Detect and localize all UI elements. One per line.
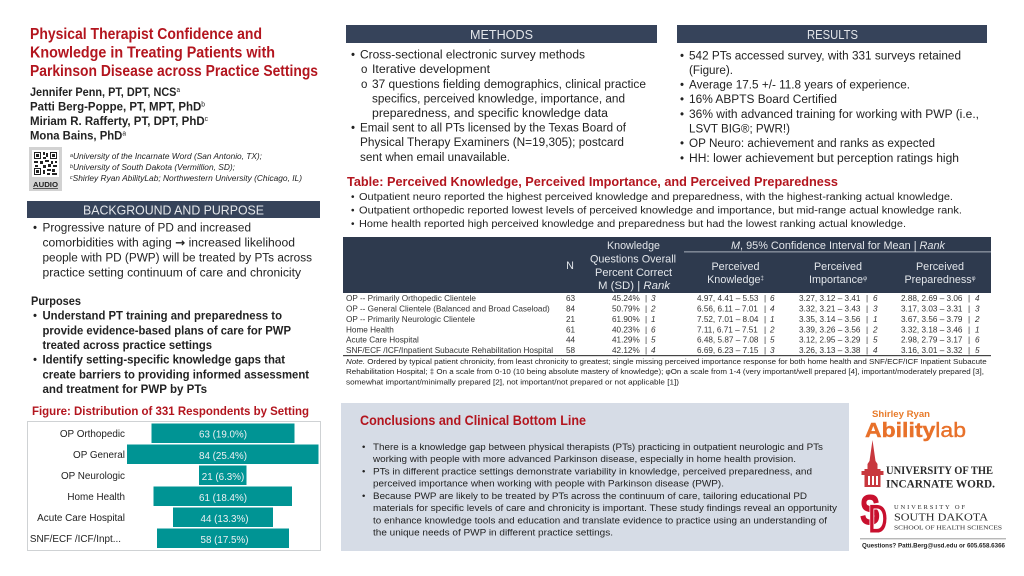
table row: SNF/ECF/ICF: | — [645, 346, 647, 355]
table row: primarily orthopedic: 6 — [770, 294, 775, 303]
table row: SNF/ECF/ICF: 58 — [566, 346, 576, 355]
authors: Mona Bains, PhD — [30, 128, 128, 142]
table header: Perceived — [711, 261, 760, 273]
text block: background — [33, 223, 312, 279]
text block: conclusions: materials for specific levels of care and chronicity is important. These study findings reveal an opportunity — [373, 503, 837, 514]
table header: ‡ — [761, 276, 764, 282]
text block: methods: o — [361, 79, 367, 91]
table header: N — [566, 260, 574, 272]
table row: general clientele: | — [866, 305, 868, 314]
table header: Knowledge — [607, 240, 660, 252]
text block: methods: Email sent to all PTs licensed by the Texas Board of — [360, 123, 627, 135]
table row: acute care hospital: Acute Care Hospital — [346, 336, 419, 345]
text block: table findings: Home health reported high perceived knowledge and preparedness but had the lowest ranking actual knowledge. — [359, 219, 906, 230]
table row: acute care hospital: | — [968, 336, 970, 345]
table row: acute care hospital: | — [866, 336, 868, 345]
table header: Importance — [809, 274, 863, 286]
text block: table findings — [351, 192, 962, 230]
text block: purposes: • — [33, 355, 37, 367]
affiliations: b — [70, 164, 73, 170]
table row: SNF/ECF/ICF: 6.69, 6.23 – 7.15 — [697, 346, 759, 355]
logo: University of South Dakota — [860, 486, 1002, 542]
table row: general clientele: | — [645, 305, 647, 314]
table row: acute care hospital: 6 — [975, 336, 980, 345]
table row: acute care hospital: 5 — [651, 336, 656, 345]
text block: conclusions: PTs in different practice settings demonstrate variability in knowledge, perceived preparedness, and — [373, 466, 812, 477]
bar chart: respondents by setting: OP Orthopedic — [60, 429, 125, 440]
logo: University of the Incarnate Word: UNIVERSITY OF THE — [886, 465, 993, 477]
text block: purposes: and treatment for PWP by PTs — [42, 384, 207, 396]
panel: conclusions — [341, 403, 849, 551]
title — [30, 26, 318, 80]
text block: results: • — [680, 80, 684, 92]
table row: general clientele: OP -- General Clientele (Balanced and Broad Caseload) — [346, 305, 550, 314]
text block: table findings: • — [351, 192, 355, 203]
text block: conclusions: working with people with more advanced Parkinson disease, especially in home health provision. — [372, 454, 796, 465]
table row: primarily neurologic: | — [866, 315, 868, 324]
table header — [343, 237, 991, 293]
table row: home health: 3.39, 3.26 – 3.56 — [799, 325, 861, 334]
table row: home health: 3.32, 3.18 – 3.46 — [901, 325, 963, 334]
table header: Percent Correct — [595, 267, 672, 279]
table row: general clientele: | — [764, 305, 766, 314]
table header: φ — [972, 276, 976, 282]
text block: methods: sent when email unavailable. — [360, 152, 510, 164]
title: Physical Therapist Confidence and — [30, 26, 262, 43]
text block: table findings: Outpatient orthopedic reported lowest levels of perceived knowledge and importance, but mid-range actual knowledge rank. — [359, 206, 962, 216]
text block: results: 542 PTs accessed survey, with 331 surveys retained — [689, 50, 961, 62]
table row: primarily neurologic: | — [764, 315, 766, 324]
text block: conclusions: perceived importance when working with people with Parkinson disease (PWP). — [373, 479, 724, 490]
logo: Shirley Ryan AbilityLab: Shirley Ryan — [872, 409, 930, 420]
table row: primarily neurologic: 1 — [651, 315, 656, 324]
text block: methods: • — [351, 50, 355, 62]
table note: Rehabilitation Hospital; ‡ On a scale from 0-10 (10 being absolute mastery of knowledge); φOn a scale from 1-4 (very important/well prepared [4], important/moderately prepared [3], — [346, 367, 984, 376]
bar chart: respondents by setting: 44 (13.3%) — [201, 514, 248, 525]
text block: results: Average 17.5 +/- 11.8 years of experience. — [689, 80, 910, 92]
text block: purposes: Identify setting-specific knowledge gaps that — [42, 355, 285, 367]
table note — [346, 357, 987, 387]
text block: methods: Iterative development — [372, 64, 491, 76]
text block: background: • — [33, 223, 37, 235]
text block: background: practice setting continuum of care and chronicity — [42, 267, 301, 279]
table row: general clientele: 4 — [770, 305, 775, 314]
authors — [30, 85, 208, 142]
table row: home health: 6 — [651, 325, 656, 334]
table row: primarily orthopedic: 4 — [975, 294, 980, 303]
table row: acute care hospital: 5 — [770, 336, 775, 345]
table row: primarily neurologic: | — [968, 315, 970, 324]
table row: acute care hospital: 5 — [873, 336, 878, 345]
text block: purposes: • — [33, 311, 37, 323]
heading: background and purpose: BACKGROUND AND PURPOSE — [83, 203, 264, 218]
text block: background: Progressive nature of PD and increased — [42, 223, 251, 235]
table row: home health: 2 — [769, 325, 775, 334]
text block: table findings: Outpatient neuro reported the highest perceived knowledge and preparedness, with the highest-ranking actual knowledge. — [359, 192, 953, 203]
text block: results: (Figure). — [689, 65, 733, 77]
text block: conclusions — [362, 442, 837, 538]
table row: general clientele: | — [968, 305, 970, 314]
authors: a — [122, 130, 126, 138]
text block: results: 16% ABPTS Board Certified — [689, 94, 837, 106]
table header: φ — [863, 276, 867, 282]
logo: Shirley Ryan AbilityLab: Ability lab — [865, 419, 966, 442]
table row: home health: | — [764, 325, 766, 334]
text block: table findings: • — [351, 206, 355, 216]
text block: conclusions: • — [362, 442, 365, 453]
affiliations — [70, 152, 302, 183]
table row: primarily orthopedic: 6 — [873, 294, 878, 303]
table row: acute care hospital: | — [645, 336, 647, 345]
text block: conclusions: to enhance knowledge tools and education and translate evidence to practice using an understanding of — [373, 515, 827, 526]
table row: general clientele: 6.56, 6.11 – 7.01 — [697, 305, 758, 314]
text block: purposes: Purposes — [31, 296, 81, 308]
table row: primarily neurologic: 7.52, 7.01 – 8.04 — [697, 315, 759, 324]
text block: purposes: treated across practice settings — [42, 340, 212, 352]
bar chart: respondents by setting: OP Neurologic — [61, 471, 125, 482]
panel: figure — [28, 404, 320, 550]
text block: purposes: create barriers to providing informed assessment — [42, 369, 309, 381]
affiliations: Shirley Ryan AbilityLab; Northwestern University (Chicago, IL) — [73, 174, 302, 183]
table row: general clientele: 3 — [873, 305, 878, 314]
table row: primarily orthopedic: | — [645, 294, 647, 303]
table row: acute care hospital: | — [764, 336, 766, 345]
table row: primarily orthopedic: | — [866, 294, 868, 303]
text block: methods: preparedness, and specific knowledge data — [372, 108, 609, 120]
table row: SNF/ECF/ICF: 42.12% — [612, 346, 640, 355]
table row: home health: 40.23% — [612, 325, 640, 334]
table row: home health: Home Health — [346, 325, 394, 334]
authors: c — [205, 116, 208, 123]
text block: results: • — [680, 109, 684, 121]
table row: primarily orthopedic: 3 — [651, 294, 656, 303]
affiliations: a — [70, 153, 73, 159]
text block: results: • — [680, 138, 684, 150]
text block: methods: specifics, perceived knowledge, importance, and — [372, 94, 625, 106]
table row: acute care hospital: 6.48, 5.87 – 7.08 — [697, 336, 759, 345]
text block: results: • — [680, 50, 684, 62]
text block: results: • — [680, 94, 684, 106]
table row: home health: | — [968, 325, 970, 334]
table row: home health: 2 — [872, 325, 878, 334]
contact line: Questions? Patti.Berg@usd.edu or 605.658.6366 — [862, 543, 1005, 550]
logo: University of the Incarnate Word: INCARNATE WORD. — [886, 478, 995, 490]
text block: purposes: Understand PT training and preparedness to — [42, 311, 282, 323]
table row: general clientele: 3 — [975, 305, 980, 314]
bar chart: respondents by setting: SNF/ECF /ICF/Inpt... — [30, 534, 121, 545]
table header: Questions Overall — [590, 254, 676, 266]
text block: conclusions: There is a knowledge gap between physical therapists (PTs) practicing in outpatient neurologic and PTs — [373, 442, 823, 453]
table row: primarily orthopedic: 3.27, 3.12 – 3.41 — [799, 294, 861, 303]
logo: University of South Dakota: S — [860, 486, 880, 533]
text block: methods: 37 questions fielding demographics, clinical practice — [372, 79, 646, 91]
heading: methods — [346, 25, 657, 43]
table row: primarily orthopedic: 2.88, 2.69 – 3.06 — [901, 294, 963, 303]
affiliations: University of South Dakota (Vermillion, SD); — [73, 163, 235, 172]
text block: results: OP Neuro: achievement and ranks as expected — [689, 138, 935, 150]
table row: home health: | — [866, 325, 868, 334]
heading: results: RESULTS — [807, 27, 858, 42]
text block: background: comorbidities with aging → increased likelihood — [42, 236, 295, 250]
table row: primarily orthopedic: 63 — [566, 294, 576, 303]
table row: primarily neurologic: 1 — [873, 315, 878, 324]
table row: home health: 1 — [975, 325, 980, 334]
table row: SNF/ECF/ICF: 5 — [975, 346, 980, 355]
table header: Preparedness — [904, 274, 972, 286]
text block: methods: Cross-sectional electronic survey methods — [360, 50, 585, 62]
logo: University of South Dakota: UNIVERSITY OF — [894, 504, 965, 511]
table row: primarily neurologic: OP -- Primarily Neurologic Clientele — [346, 315, 476, 324]
table row: general clientele: 3.17, 3.03 – 3.31 — [901, 305, 963, 314]
table header: M, 95% Confidence Interval for Mean | Rank — [731, 240, 946, 252]
text block: conclusions: Because PWP are likely to be treated by PTs across the continuum of care, tailoring educational PD — [373, 491, 807, 502]
bar chart: respondents by setting: Acute Care Hospital — [37, 513, 125, 524]
table row: home health: | — [645, 325, 647, 334]
table row: primarily neurologic: 1 — [770, 315, 775, 324]
text block: background: people with PD (PWP) will be treated by PTs across — [42, 252, 312, 264]
table row: general clientele: 50.79% — [612, 305, 640, 314]
affiliations: c — [70, 175, 73, 181]
heading: background and purpose — [27, 201, 320, 218]
logo: University of the Incarnate Word — [862, 440, 995, 490]
table row: acute care hospital: 41.29% — [612, 336, 640, 345]
table row: primarily neurologic: 21 — [566, 315, 576, 324]
logo: University of South Dakota: SCHOOL OF HEALTH SCIENCES — [894, 524, 1002, 532]
table header: Perceived — [814, 261, 862, 273]
panel: results — [677, 25, 987, 165]
text block: methods: o — [361, 64, 367, 76]
table row: primarily orthopedic: | — [764, 294, 766, 303]
bar chart: respondents by setting: Home Health — [67, 492, 125, 503]
bar chart: respondents by setting: OP General — [73, 450, 125, 461]
table row: SNF/ECF/ICF: SNF/ECF /ICF/Inpatient Subacute Rehabilitation Hospital — [346, 346, 553, 355]
table row: SNF/ECF/ICF: 3.26, 3.13 – 3.38 — [799, 346, 861, 355]
authors: b — [201, 102, 205, 108]
table row: home health: 7.11, 6.71 – 7.51 — [697, 325, 758, 334]
heading: conclusions: Conclusions and Clinical Bottom Line — [360, 413, 586, 428]
table row: primarily orthopedic: 4.97, 4.41 – 5.53 — [697, 294, 759, 303]
logo: University of South Dakota: SOUTH DAKOTA — [894, 512, 988, 524]
table row: primarily neurologic: 61.90% — [612, 315, 640, 324]
table header: Knowledge — [707, 274, 761, 286]
table row: home health: 61 — [566, 325, 576, 334]
table row: SNF/ECF/ICF: 3 — [770, 346, 775, 355]
bar chart: respondents by setting: 63 (19.0%) — [199, 430, 247, 440]
text block: results: 36% with advanced training for working with PWP (i.e., — [689, 109, 979, 121]
text block: conclusions: • — [362, 466, 365, 477]
text block: methods: • — [351, 123, 355, 135]
table row: primarily orthopedic: OP -- Primarily Orthopedic Clientele — [346, 294, 476, 303]
heading: methods: METHODS — [470, 27, 533, 42]
table row: SNF/ECF/ICF: 4 — [873, 346, 878, 355]
table row: SNF/ECF/ICF: 4 — [651, 346, 656, 355]
authors: Jennifer Penn, PT, DPT, NCS — [30, 85, 191, 99]
heading: results — [677, 25, 987, 43]
table row: primarily neurologic: 3.35, 3.14 – 3.56 — [799, 315, 861, 324]
table header: M (SD) | Rank — [598, 280, 671, 292]
icon: audio QR code — [29, 147, 62, 191]
panel: methods — [346, 25, 657, 164]
table row: primarily neurologic: 2 — [974, 315, 980, 324]
table row: SNF/ECF/ICF: 3.16, 3.01 – 3.32 — [901, 346, 963, 355]
authors: Miriam R. Rafferty, PT, DPT, PhD — [30, 114, 212, 128]
authors: Patti Berg-Poppe, PT, MPT, PhD — [30, 100, 209, 114]
bar chart: respondents by setting: 58 (17.5%) — [201, 535, 248, 546]
table row: general clientele: 3.32, 3.21 – 3.43 — [799, 305, 861, 314]
affiliations: University of the Incarnate Word (San Antonio, TX); — [73, 152, 262, 161]
text block: conclusions: • — [362, 491, 365, 502]
table row: SNF/ECF/ICF: | — [866, 346, 868, 355]
icon: audio QR code: AUDIO — [33, 182, 59, 189]
table header: Perceived — [916, 261, 964, 273]
text block: purposes — [31, 296, 309, 396]
text block: conclusions: the unique needs of PWP in different practice settings. — [373, 527, 613, 538]
table row: acute care hospital: 44 — [566, 336, 576, 345]
table row: primarily orthopedic: | — [968, 294, 970, 303]
table row: acute care hospital: 2.98, 2.79 – 3.17 — [901, 336, 963, 345]
table row: primarily neurologic: | — [645, 315, 647, 324]
table — [343, 237, 991, 356]
bar chart: respondents by setting: 21 (6.3%) — [202, 472, 244, 483]
text block: methods — [351, 50, 646, 164]
panel: background and purpose — [27, 201, 320, 396]
table row: acute care hospital: 3.12, 2.95 – 3.29 — [799, 336, 861, 345]
bar chart: respondents by setting: 84 (25.4%) — [199, 451, 247, 462]
text block: results: LSVT BIG®; PWR!) — [689, 124, 790, 136]
title: Knowledge in Treating Patients with — [30, 44, 275, 62]
table row: general clientele: 2 — [650, 305, 656, 314]
heading: table title: Table: Perceived Knowledge, Perceived Importance, and Perceived Preparedness — [347, 175, 838, 189]
table note: somewhat important/minimally prepared [2], not important/not prepared or not applicable [1]) — [346, 378, 679, 387]
logo: Shirley Ryan AbilityLab — [865, 409, 966, 442]
text block: results — [680, 50, 979, 165]
table row: primarily orthopedic: 45.24% — [612, 294, 640, 303]
text block: methods: Physical Therapy Examiners (N=19,305); postcard — [360, 137, 624, 149]
bar chart: respondents by setting: 61 (18.4%) — [199, 493, 247, 504]
text block: table findings: • — [351, 219, 355, 230]
table note: Note. Ordered by typical patient chronicity, from least chronicity to greatest; single missing perceived importance response for both home health and SNF/ECF/ICF Inpatient Subacute — [346, 357, 987, 366]
table row: SNF/ECF/ICF: | — [968, 346, 970, 355]
logo: University of South Dakota: D — [868, 495, 888, 542]
table row: primarily neurologic: 3.67, 3.56 – 3.79 — [901, 315, 963, 324]
text block: results: HH: lower achievement but perception ratings high — [689, 153, 959, 165]
title: Parkinson Disease across Practice Settings — [30, 63, 318, 80]
heading: figure: Figure: Distribution of 331 Respondents by Setting — [32, 404, 309, 418]
table row: SNF/ECF/ICF: | — [764, 346, 766, 355]
text block: purposes: provide evidence-based plans of care for PWP — [42, 325, 291, 337]
text block: results: • — [680, 153, 684, 165]
bar chart: respondents by setting — [28, 422, 320, 550]
authors: a — [176, 87, 180, 94]
table row: general clientele: 84 — [566, 305, 576, 314]
